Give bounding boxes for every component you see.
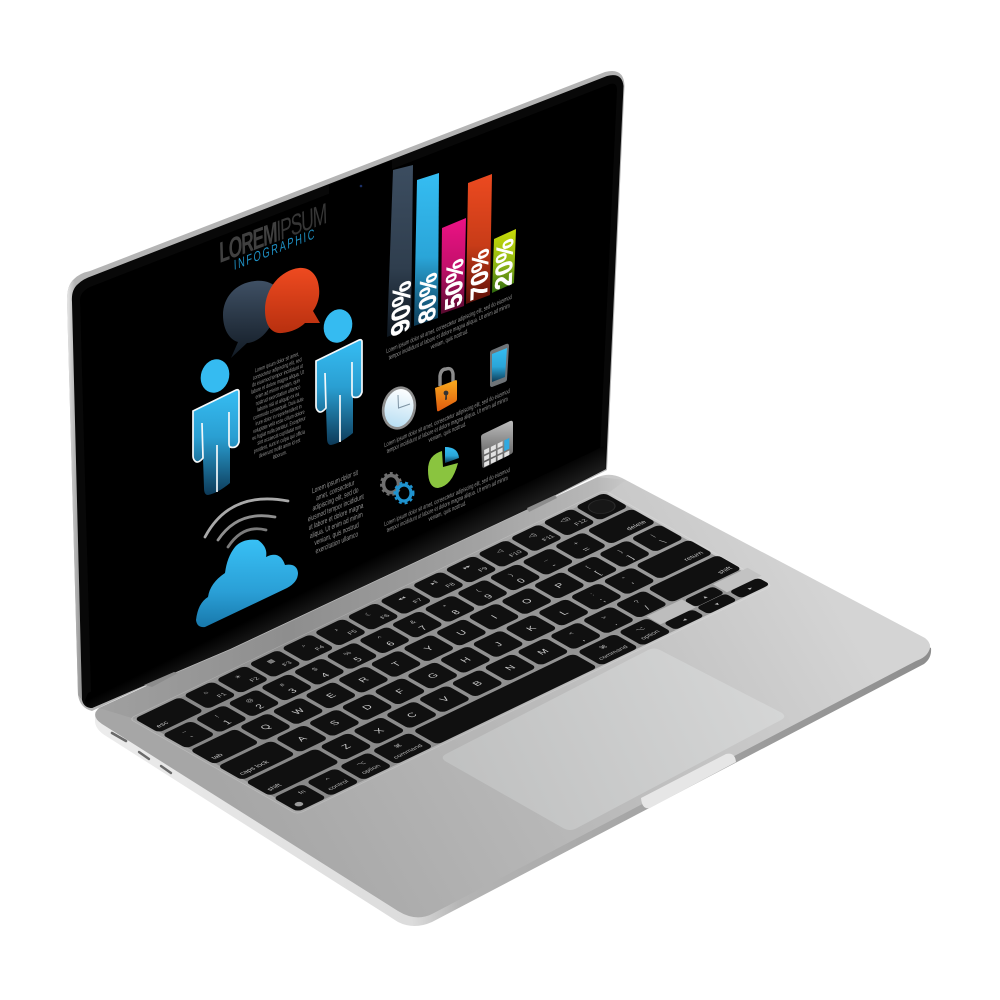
right hinge (527, 495, 557, 512)
text block: under bars: veniam, quis nostrud. (431, 328, 469, 352)
function key row: F4 (314, 645, 327, 652)
number key row: 4 (319, 671, 333, 679)
function key row: ▦ (265, 658, 277, 665)
base top surface (95, 475, 930, 917)
subtitle: infographic: INFOGRAPHIC (234, 226, 315, 273)
number key row: ` (189, 735, 201, 741)
text block: under gears row: Lorem ipsum dolor sit amet, consectetur adipiscing elit, sed do eiusmod (384, 467, 510, 529)
text block: centre column: deserunt mollit anim id est (259, 437, 301, 460)
qwerty key row: T (390, 660, 404, 668)
home key row: J (492, 641, 506, 648)
bottom modifier row: option (639, 629, 662, 641)
bar: 50% (440, 218, 469, 314)
bar: 70%: 70% (466, 245, 495, 303)
function key row: ☀ (233, 674, 244, 680)
bottom modifier row: ⌘ (392, 742, 405, 749)
home key row: D (360, 703, 376, 712)
function key row: F6 (379, 613, 392, 620)
bottom modifier row: ⌥ (355, 760, 369, 767)
qwerty key row: I (489, 614, 501, 620)
speech bubbles (223, 268, 320, 358)
shift key row: C (405, 711, 420, 719)
lower bezel gradient (85, 446, 606, 708)
person left (193, 356, 239, 495)
lid left edge highlight (67, 280, 82, 700)
number key row: % (342, 651, 354, 657)
icon: calculator (481, 421, 513, 468)
qwerty key row: P (553, 582, 568, 590)
camera lens (360, 185, 362, 187)
body (193, 390, 239, 495)
text block: under gears row: tempor incididunt ut labore et dolore magna aliqua. Ut enim ad minim (387, 475, 508, 535)
number key row: 6 (384, 640, 398, 648)
black display (80, 84, 617, 694)
function key row: ☾ (364, 611, 375, 617)
function key row: F12 (573, 518, 590, 527)
text block: centre column: consectetur adipiscing elit, sed (253, 356, 302, 382)
number key row: delete (625, 520, 649, 532)
function key row: F8 (444, 582, 458, 589)
text block: centre column (250, 349, 307, 469)
text block: centre column: sint occaecat cupidatat non (257, 423, 301, 447)
ports (112, 733, 171, 773)
shift key row: shift (266, 783, 284, 792)
bottom modifier row: command (392, 743, 425, 760)
person right (316, 306, 362, 445)
text block: under clock row: tempor incididunt ut labore et dolore magna aliqua. Ut enim ad minim (387, 396, 508, 456)
text block: beside cloud: eiusmod tempor incididunt (308, 493, 364, 524)
function key row: ▸▸ (461, 564, 473, 570)
gray gear (381, 473, 401, 495)
text block: centre column: proident, sunt in culpa qui officia (254, 429, 305, 455)
icon: pie chart (428, 447, 459, 488)
left hinge (144, 672, 178, 687)
function key row: ◁ (495, 549, 505, 554)
icon: padlock (435, 369, 457, 411)
shift key row: X (372, 727, 388, 735)
red speech bubble (265, 268, 320, 333)
text block: centre column: nostrud exercitation ullamco (256, 384, 301, 408)
text block: beside cloud: Lorem ipsum dolor sit (312, 469, 358, 496)
shift key row: B (470, 680, 485, 688)
number key row: - (548, 562, 560, 569)
home key row: caps lock (238, 760, 272, 776)
text block: centre column: voluptate velit esse cillum dolore (253, 409, 305, 436)
keyboard well (137, 493, 768, 811)
bottom modifier row (274, 618, 671, 811)
bar: 50%: 50% (440, 255, 469, 313)
bar: 80%: 80% (414, 269, 443, 327)
home key row: G (425, 672, 441, 680)
text block: centre column: laboris nisi ut aliquip ex ea (257, 391, 300, 414)
home key row: K (524, 624, 540, 633)
finger notch (641, 754, 736, 808)
text block: beside cloud (307, 467, 365, 559)
qwerty key row: { (584, 565, 593, 570)
number key row: ~ (180, 730, 190, 735)
number key row: * (442, 604, 450, 609)
function key row: F7 (412, 597, 425, 604)
function key row: ☼ (200, 690, 212, 696)
home key row: ; (597, 597, 608, 604)
qwerty key row: } (617, 549, 625, 554)
body outline (316, 340, 362, 442)
text block: beside cloud: adipiscing elit, sed do (312, 486, 359, 513)
qwerty key row (191, 525, 683, 764)
function key row: F11 (541, 534, 557, 542)
shift key row: N (503, 664, 519, 672)
qwerty key row: [ (593, 570, 604, 576)
qwerty key row: R (356, 676, 372, 684)
home key row: F (393, 688, 408, 696)
body outline (193, 390, 239, 492)
number key row: _ (538, 557, 549, 562)
text block: centre column: Lorem ipsum dolor sit amet, (255, 351, 299, 375)
home key row: ' (630, 582, 641, 588)
home key row (219, 540, 712, 780)
number key row: 0 (515, 577, 529, 585)
shift key row: ? (633, 599, 642, 605)
qwerty key row: tab (210, 753, 225, 760)
icon: gears (381, 473, 414, 504)
dark speech bubble (223, 281, 280, 358)
shift key row: , (576, 636, 588, 643)
function key row: F1 (216, 692, 229, 699)
home key row: " (621, 576, 630, 581)
home key row: : (589, 592, 596, 597)
qwerty key row: O (519, 597, 535, 606)
function key row: ▸‖ (429, 580, 440, 586)
head (319, 306, 357, 346)
qwerty key row: \ (658, 539, 670, 545)
icon: wifi arcs (205, 499, 288, 547)
home key row: return (683, 551, 706, 562)
laptop base (95, 475, 931, 926)
home key row: A (295, 735, 310, 743)
bottom modifier row: option (360, 764, 383, 775)
home key row: H (458, 656, 474, 664)
text block: centre column: do eiusmod tempor incididunt ut (252, 362, 303, 389)
number key row: 1 (221, 719, 235, 726)
shift key row: M (535, 648, 552, 657)
function key row: F3 (281, 660, 294, 667)
bar chart (386, 165, 519, 340)
number key row: = (580, 546, 594, 553)
number key row: & (408, 619, 419, 625)
text block: under clock row: veniam, quis nostrud. (429, 421, 467, 445)
qwerty key row: W (290, 707, 308, 716)
text block: beside cloud: aliqua. Ut enim ad minim (310, 511, 363, 541)
number key row: @ (244, 698, 256, 704)
blue gear (394, 482, 414, 504)
lid silver rim (67, 71, 624, 711)
bar: 70% (466, 174, 495, 304)
qwerty key row: | (650, 534, 657, 538)
bar: 90%: 90% (386, 277, 417, 340)
text block: centre column: enim ad minim veniam, quis (256, 377, 301, 401)
shift key row: . (609, 621, 621, 627)
text block: beside cloud: ut labore et dolore magna (309, 502, 364, 532)
body (316, 340, 362, 445)
text block: centre column: eu fugiat nulla pariatur. Excepteur (252, 415, 306, 443)
shift key row: Z (339, 743, 354, 751)
function key row: ♪ (332, 628, 341, 632)
text block: under bars: tempor incididunt ut labore et dolore magna aliqua. Ut enim ad minim (389, 302, 510, 362)
function key row: ◁) (526, 533, 539, 539)
function key row: ⌕ (299, 643, 308, 648)
arrow keys: ◂ (680, 617, 690, 622)
number key row: 3 (286, 687, 300, 695)
shift key row: / (642, 605, 654, 611)
head (196, 356, 234, 396)
arrow keys: ▾ (713, 602, 723, 607)
number key row (163, 509, 655, 748)
function key row: esc (155, 720, 171, 729)
number key row: 8 (449, 609, 463, 616)
text block: beside cloud: veniam, quis nostrud (314, 521, 359, 548)
number key row: ! (214, 714, 221, 719)
screen infographic (193, 160, 519, 627)
home key row: S (328, 719, 343, 727)
icon: phone (490, 344, 509, 387)
text block: beside cloud: exercitation ullamco (315, 530, 359, 556)
number key row: ) (507, 573, 515, 577)
laptop lid (67, 71, 624, 711)
function key row: F5 (346, 629, 360, 636)
arrow keys: ▴ (701, 594, 710, 600)
qwerty key row: E (324, 692, 339, 700)
qwerty key row: U (454, 629, 470, 637)
function key row (135, 493, 627, 732)
icon: cloud (196, 540, 298, 627)
bar: 90% (386, 165, 417, 340)
function key row: F10 (508, 550, 525, 558)
number key row: 2 (253, 703, 267, 711)
text block: centre column: labore et dolore magna aliqua. Ut (251, 369, 305, 396)
shift key row: V (438, 695, 453, 704)
base shell edge (95, 480, 931, 926)
icon: clock (379, 384, 419, 432)
number key row: + (572, 541, 581, 546)
bottom modifier row: command (597, 645, 630, 661)
number key row: 5 (351, 656, 365, 663)
camera notch (329, 160, 392, 208)
bottom modifier row: control (326, 779, 351, 791)
keyboard (129, 488, 776, 814)
text block: centre column: irure dolor in reprehenderit in (256, 403, 302, 428)
shift key row: > (600, 615, 609, 620)
bottom modifier row: fn (297, 789, 308, 795)
qwerty key row: ] (625, 554, 637, 561)
arrow keys: ▸ (746, 586, 756, 591)
title (219, 198, 328, 273)
function key row: F9 (477, 566, 490, 573)
shift key row: shift (717, 566, 734, 575)
text block: centre column: commodo consequat. Duis aute (253, 396, 304, 422)
text block: under gears row: veniam, quis nostrud. (429, 500, 467, 524)
function key row: ◂◂ (396, 596, 408, 602)
qwerty key row: Y (422, 644, 438, 653)
number key row: $ (311, 667, 320, 672)
function key row: F2 (248, 676, 262, 683)
text block: beside cloud: amet, consectetur (316, 479, 355, 503)
bar: 80% (414, 173, 443, 327)
trackpad (443, 648, 784, 830)
function key row: ◁)) (558, 516, 572, 524)
bezel (72, 75, 624, 708)
bottom modifier row: ⌥ (634, 626, 648, 633)
home key row: L (557, 609, 572, 617)
text block: under clock row: Lorem ipsum dolor sit amet, consectetur adipiscing elit, sed do eiusmod (384, 388, 510, 450)
arrow keys (647, 568, 773, 631)
shift key row: < (567, 631, 577, 636)
title: lorem ipsum: LOREMIPSUM (219, 198, 328, 270)
keyboard outline (129, 490, 772, 814)
bottom modifier row: ⌘ (597, 644, 610, 650)
shift key row (246, 555, 741, 795)
number key row: ( (475, 588, 483, 593)
number key row: ^ (376, 635, 386, 640)
text block: under bars: Lorem ipsum dolor sit amet, consectetur adipiscing elit, sed do eiusmod (386, 294, 512, 356)
qwerty key row: Q (258, 723, 274, 732)
number key row: 7 (417, 624, 431, 632)
text block: centre column: laborum. (273, 449, 287, 461)
bar: 20%: 20% (490, 235, 519, 293)
number key row: # (278, 683, 288, 688)
bottom modifier row: ^ (324, 777, 334, 782)
number key row: 9 (482, 593, 496, 601)
hinge strip above keyboard (99, 477, 626, 719)
